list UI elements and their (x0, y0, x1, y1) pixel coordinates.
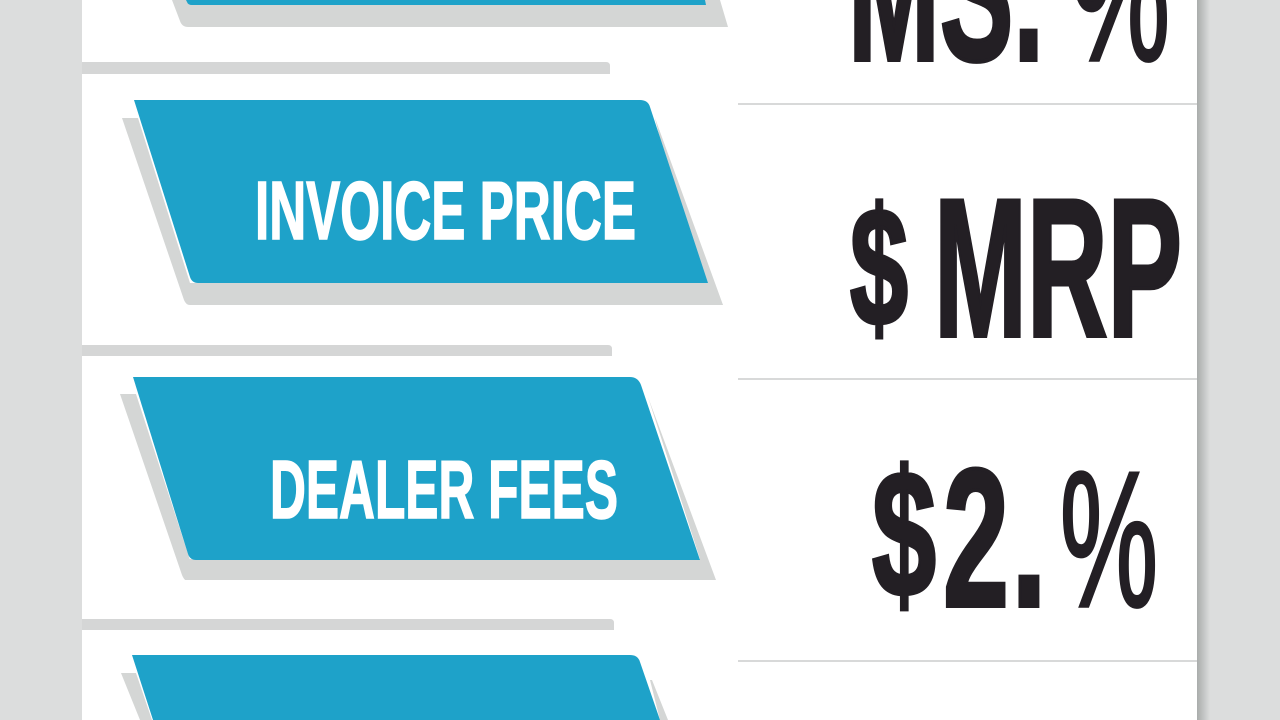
divider: left 2 (82, 345, 612, 356)
value: dollar two percent: . (1011, 428, 1047, 648)
divider: right 3 (738, 660, 1197, 662)
value: dollar two percent (872, 428, 1158, 648)
divider: left 3 (82, 619, 614, 630)
top banner (cropped) (172, 0, 728, 27)
value: dollar MRP: $ (850, 173, 908, 361)
value: dollar two percent: 2 (943, 428, 1009, 648)
bottom banner (cropped) (121, 655, 668, 720)
label: invoice price: INVOICE PRICE (255, 164, 636, 257)
label: dealer fees: DEALER FEES (270, 443, 618, 536)
divider: left 1 (82, 62, 610, 74)
value: dollar MRP (850, 158, 1182, 378)
value: dollar two percent: $ (872, 434, 936, 635)
panel shadow (1197, 0, 1210, 720)
banner: invoice price (122, 100, 723, 305)
divider: right 2 (738, 378, 1197, 380)
divider: right 1 (738, 103, 1197, 105)
banner: dealer fees (120, 377, 716, 580)
value: dollar two percent: % (1060, 431, 1158, 647)
